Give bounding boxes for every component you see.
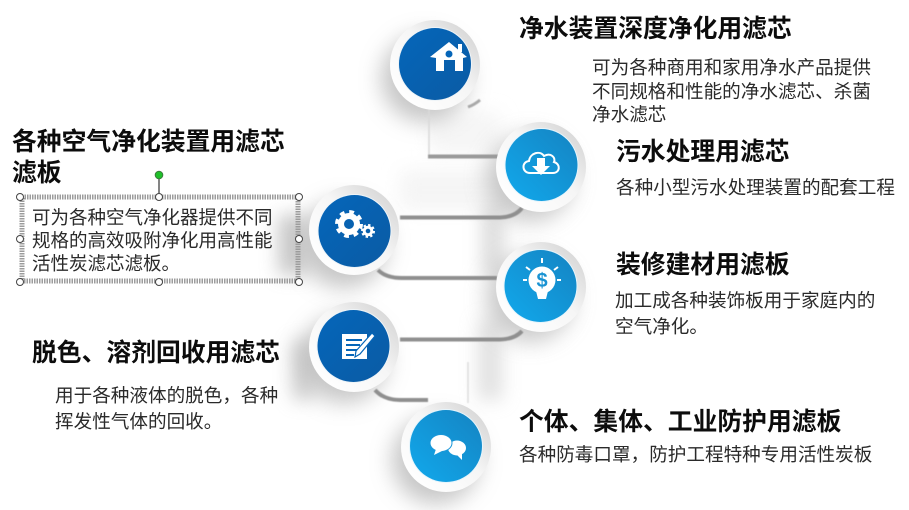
icon: cloud with arrow [523,153,559,175]
text: water purifier [592,57,871,125]
circle node: protection [401,402,491,492]
text: building materials: 加工成各种装饰板用于家庭内的 [615,290,875,311]
connector: air filter to building materials [378,270,497,278]
icon: speech bubbles [430,434,466,460]
circle node: decolor and solvent recovery [309,302,399,392]
text: protection: 各种防毒口罩，防护工程特种专用活性炭板 [519,444,872,465]
icon: house [430,42,467,71]
selection frame around text box [16,171,302,286]
heading: air filter [12,128,285,187]
circle node: wastewater [496,122,586,212]
heading: air filter: 滤板 [12,160,62,187]
text: air filter [32,207,273,274]
heading: decolor and solvent recovery: 脱色、溶剂回收用滤芯 [32,340,280,367]
connector: air filter to wastewater [400,208,522,218]
icon: gears [337,212,374,237]
text: wastewater: 各种小型污水处理装置的配套工程 [616,177,895,198]
connector: decolor to protection [375,362,468,403]
text: water purifier: 净水滤芯 [592,104,666,125]
text: air filter: 活性炭滤芯滤板。 [32,253,180,274]
icon: light bulb with dollar: $ [536,270,548,292]
icon: notepad and pencil [342,333,375,359]
text: decolor and solvent recovery: 用于各种液体的脱色，各种 [55,385,278,406]
text: decolor and solvent recovery: 挥发性气体的回收。 [55,411,222,432]
text: building materials: 空气净化。 [615,316,708,337]
circle node: air filter [309,185,399,275]
text: air filter: 可为各种空气净化器提供不同 [32,207,273,228]
circle node: building materials [496,242,586,332]
text: water purifier: 可为各种商用和家用净水产品提供 [592,57,871,78]
heading: water purifier: 净水装置深度净化用滤芯 [519,16,792,43]
background soft shadows [278,34,574,504]
heading: building materials: 装修建材用滤板 [616,252,790,279]
text: air filter: 规格的高效吸附净化用高性能 [32,230,273,251]
text: building materials [615,290,875,337]
heading: protection: 个体、集体、工业防护用滤板 [519,409,841,436]
circle node: water purifier [390,20,480,110]
heading: wastewater: 污水处理用滤芯 [616,139,790,166]
text: water purifier: 不同规格和性能的净水滤芯、杀菌 [592,80,871,102]
connector: decolor to building materials [400,331,522,340]
text: decolor and solvent recovery [55,385,278,432]
heading: air filter: 各种空气净化装置用滤芯 [12,129,285,156]
connector: water purifier to wastewater [428,100,500,156]
